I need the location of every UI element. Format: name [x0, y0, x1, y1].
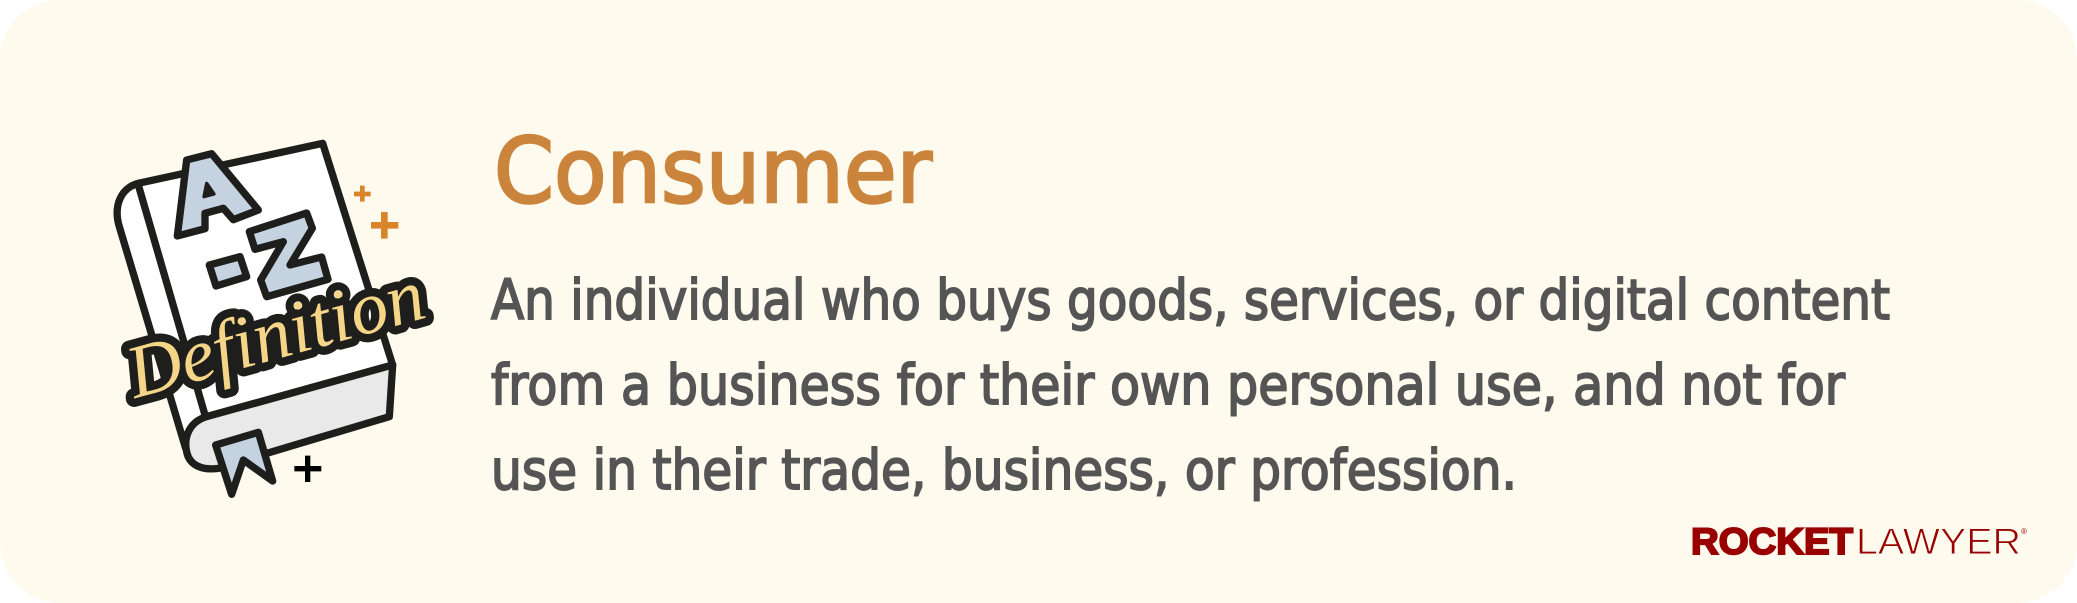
book spine line	[138, 185, 205, 415]
letter Z	[249, 213, 328, 297]
line 2: from a business for their own personal use, and not for	[491, 353, 1845, 417]
icon: large orange plus	[371, 212, 398, 239]
title: Consumer	[494, 119, 932, 224]
dash	[209, 257, 247, 286]
letter A	[177, 154, 258, 236]
line 3: use in their trade, business, or profession.	[491, 438, 1517, 502]
icon: black plus	[294, 456, 321, 482]
logo word Lawyer: LAWYER	[1856, 521, 2021, 562]
logo word Rocket: ROCKET	[1691, 521, 1853, 562]
logo: Rocket Lawyer	[1691, 521, 2027, 562]
book cover	[117, 143, 393, 448]
definition lettering: Definition	[116, 253, 433, 415]
definition text	[491, 268, 1890, 502]
registered mark: ®	[2021, 527, 2027, 536]
icon: A-Z definition book	[116, 143, 433, 494]
book pages	[186, 365, 393, 469]
letter A counter	[204, 183, 214, 197]
line 1: An individual who buys goods, services, or digital content	[491, 268, 1890, 332]
bookmark	[216, 432, 273, 494]
icon: small orange plus	[354, 186, 371, 202]
